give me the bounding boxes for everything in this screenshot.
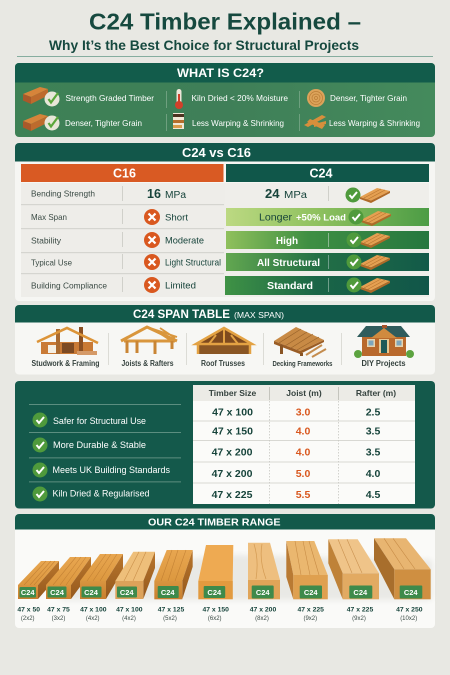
benefit: safer [32,412,146,428]
panel: C24 vs C16 [15,143,435,301]
beam 47x225 second: C24 [353,588,368,597]
beam 47x200: (8x2) [255,616,269,622]
text: denser grain 1: Denser, Tighter Grain [330,94,407,103]
table row 47 x 100 [212,406,380,418]
beam 47x225 second: (9x2) [352,616,366,622]
beam 47x225: (9x2) [303,616,317,622]
beam 47x125: 47 x 125 [158,606,184,614]
column header: C24: C24 [310,166,333,180]
table row 47 x 200 second [212,468,380,480]
text: roof trusses: Roof Trusses [201,359,245,368]
beam 47x125 [154,550,193,622]
beam 47x100: C24 [84,588,99,597]
beam 47x75: (3x2) [52,616,65,622]
icon: wood rings [307,89,325,107]
beam 47x50: C24 [21,588,35,597]
benefit: kiln dried: Kiln Dried & Regularised [52,488,150,498]
heading: C24 vs C16: C24 vs C16 [182,146,251,160]
beam 47x100: 47 x 100 [80,606,107,614]
panel: benefits and span table [15,381,435,508]
benefit: durable [32,438,146,452]
column header: C16 [21,164,224,182]
text: denser grain 2: Denser, Tighter Grain [65,119,142,128]
beam 47x150: C24 [207,588,222,597]
icon: decking frame [274,327,326,357]
beam 47x75 [46,557,91,622]
row: max span: Longer [259,212,293,224]
icon: joists and rafters [121,327,177,354]
heading: timber range: OUR C24 TIMBER RANGE [148,516,280,528]
row: stability [31,231,429,249]
table row 47 x 150 [212,426,380,438]
row: building compliance: Limited [165,280,196,292]
table row 47 x 225: 47 x 225 [212,489,253,501]
panel: span table uses [15,305,435,374]
row: max span [31,208,429,226]
icon: crossed boards [304,115,326,129]
table row 47 x 100: 2.5 [366,406,380,418]
icon: thermometer [175,89,183,109]
heading: timber range [15,514,435,530]
beam 47x150: (6x2) [208,616,222,622]
icon: stacked boards [173,113,184,129]
icon: roof truss [196,328,252,354]
row: typical use [31,253,429,271]
row: bending strength: MPa [284,190,307,201]
subtitle: Why It’s the Best Choice for Structural Projects [49,37,359,53]
beam 47x75: 47 x 75 [47,606,70,614]
row: bending strength [31,186,390,203]
benefit: standards [32,462,171,478]
beam 47x200: C24 [256,588,270,597]
beam 47x75: C24 [50,588,65,597]
table header: Timber Size [209,388,257,398]
heading: span table: C24 SPAN TABLE [133,309,230,321]
row: max span: +50% Load [296,212,346,222]
span table [193,385,415,504]
heading: span table [15,305,435,322]
beam 47x100 second [115,552,155,622]
beam 47x100 [80,554,123,622]
beam 47x50 [17,561,59,622]
table row 47 x 150: 47 x 150 [212,426,253,438]
table row 47 x 200 [212,446,380,458]
beam 47x50: 47 x 50 [17,606,40,614]
row: max span: Short [165,212,188,224]
heading: what is C24: WHAT IS C24? [177,68,264,80]
beam 47x225: C24 [304,588,318,597]
row: bending strength: Bending Strength [31,190,95,198]
benefit: durable: More Durable & Stable [53,440,146,450]
table row 47 x 200 second: 5.0 [296,468,310,480]
beam 47x100 second: C24 [120,588,134,597]
row: bending strength: 16 [147,187,161,201]
heading: C24 vs C16 [15,143,435,162]
row: building compliance: Building Compliance [31,282,107,290]
row: building compliance: Standard [267,281,313,292]
row: bending strength: 24 [265,186,280,201]
beam 47x150: 47 x 150 [202,606,229,614]
row: typical use: Typical Use [31,258,72,268]
row: stability: High [276,236,298,247]
beam 47x250: 47 x 250 [396,606,423,614]
row: max span: Max Span [31,213,67,222]
text: kiln dried: Kiln Dried < 20% Moisture [192,94,288,103]
heading: what is C24 [15,63,435,82]
benefit: standards: Meets UK Building Standards [52,465,171,475]
beam 47x150 [198,545,233,622]
beam 47x250: C24 [404,588,418,597]
beam 47x100: (4x2) [86,616,100,622]
table row 47 x 225: 5.5 [296,489,310,501]
table row 47 x 225: 4.5 [366,489,380,501]
text: studwork: Studwork & Framing [32,359,100,368]
table header: Rafter (m) [356,388,396,398]
text: less warping 2: Less Warping & Shrinking [329,119,420,128]
beam 47x125: C24 [161,588,175,597]
table header: Joist (m) [286,388,322,398]
beam 47x200 [248,543,280,622]
row: typical use: All Structural [257,258,320,269]
table row 47 x 150: 3.5 [366,426,380,438]
row: stability: Moderate [165,236,204,246]
table row 47 x 200: 4.0 [296,446,310,458]
icon: timber with check [23,87,60,106]
row: typical use: Light Structural [165,258,221,268]
beam 47x225 second [328,539,379,622]
text: joists: Joists & Rafters [122,359,174,368]
row: building compliance [31,276,429,295]
table row 47 x 200: 47 x 200 [212,446,253,458]
row: bending strength: MPa [165,190,186,201]
table row 47 x 100: 47 x 100 [212,406,253,418]
column header: C24 [226,164,429,182]
benefit: kiln dried [32,486,150,502]
beam 47x225 [286,541,328,622]
beam 47x250: (10x2) [400,616,417,622]
text: decking: Decking Frameworks [272,359,332,368]
table row 47 x 150: 4.0 [296,426,310,438]
beam 47x250 [374,538,431,622]
heading: span table: (MAX SPAN) [234,311,284,320]
beam 47x200: 47 x 200 [250,606,276,614]
text: less warping 1: Less Warping & Shrinking [192,119,284,128]
beam 47x50: (2x2) [21,616,35,622]
text: DIY: DIY Projects [362,359,406,368]
table header [209,388,396,398]
table row 47 x 200 second: 47 x 200 [212,468,253,480]
table row 47 x 200: 3.5 [366,446,380,458]
panel: what is C24 [15,63,435,137]
table row 47 x 100: 3.0 [296,406,310,418]
icon: house [354,325,414,358]
beam 47x225: 47 x 225 [297,606,324,614]
beam 47x225 second: 47 x 225 [347,606,373,614]
table row 47 x 225 [212,489,380,501]
beam 47x125: (5x2) [163,616,177,622]
icon: timber with check 2 [23,114,60,131]
beam 47x100 second: 47 x 100 [116,606,143,614]
title: C24 Timber Explained – [89,8,361,34]
column header: C16: C16 [113,166,136,180]
row: stability: Stability [31,236,62,246]
table row 47 x 200 second: 4.0 [366,468,380,480]
panel: timber range [15,514,435,628]
text: strength graded: Strength Graded Timber [66,94,154,103]
beam 47x100 second: (4x2) [122,616,136,622]
icon: studwork framing [37,327,98,355]
benefit: safer: Safer for Structural Use [53,416,146,426]
